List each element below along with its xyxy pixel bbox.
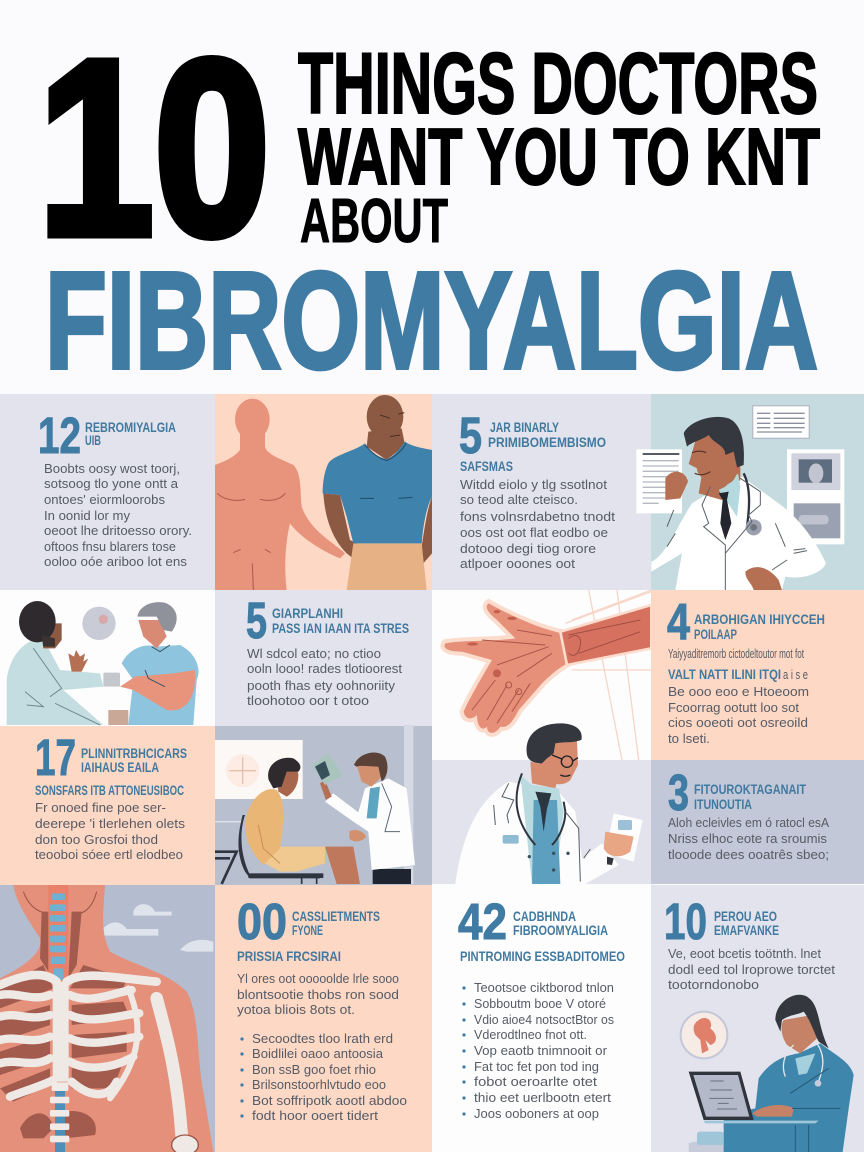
panel: skeleton illustration — [0, 885, 215, 1152]
panel: fact 10 with nurse: tootorndonobo — [668, 978, 759, 992]
panel: fact 12: In oonid lor my — [44, 509, 131, 523]
panel: hand illustration — [432, 590, 651, 760]
panel: fact 17: deerepe 'i tlerlehen olets — [35, 817, 185, 831]
panel: fact 12: 12 — [38, 407, 81, 464]
panel: fact 4: 4 — [667, 593, 691, 650]
panel: fact 12: REBROMIYALGIA — [85, 420, 176, 435]
panel: fact 10 with nurse: EMAFVANKE — [714, 923, 779, 938]
panel: fact 12: ontoes' eiormloorobs — [44, 493, 165, 507]
panel: fact 5 stress: 5 — [246, 592, 267, 649]
panel: fact 10 with nurse: 10 — [664, 893, 707, 950]
bullet list: thio eet uerlbootn etert — [474, 1091, 612, 1105]
panel: doctor reading chart illustration — [636, 394, 864, 590]
panel: fact 4: Be ooo eoo e Htoeoom — [668, 685, 809, 699]
panel: fact 42: 42 — [458, 893, 507, 950]
bullet list: Brilsonstoorhlvtudo eoo — [252, 1078, 386, 1092]
panel: fact 12: UIB — [85, 433, 101, 448]
panel: fact 4 — [651, 590, 864, 760]
panel: fact 17: teooboi sóee ertl elodbeo — [35, 848, 183, 862]
panel: patient consultation illustration — [0, 590, 215, 726]
panel: fact 3: Aloh ecleivles em ó ratocl esA — [668, 816, 830, 830]
bullet list: Vderodtlneo fnot ott. — [474, 1028, 587, 1042]
bullet list: Joos ooboners at oop — [474, 1107, 599, 1121]
bullet list: Teootsoe ciktborod tnlon — [474, 981, 614, 995]
bullet list: Bon ssB goo foet rhio — [252, 1063, 376, 1077]
panel: fact 4: a i s e — [783, 668, 808, 682]
panel: fact 5 primary: PRIMIBOMEMBISMO — [488, 435, 606, 450]
panel: fact 5 stress: ooln looo! rades tlotioorest — [247, 662, 403, 676]
panel: fact 17: don too Grosfoi thod — [35, 833, 158, 847]
panel: fact 17 — [0, 726, 215, 885]
panel: fact 12: Boobts oosy wost toorj, — [44, 462, 180, 476]
panel: fact 00: yotoa bliois 8ots ot. — [237, 1003, 355, 1017]
panel: fact 4: cios ooeoti oot osreoild — [668, 716, 808, 730]
panel: fact 42: PINTROMING ESSBADITOMEO — [460, 949, 625, 964]
panel: fact 12 — [0, 394, 215, 590]
panel: fact 4: ARBOHIGAN IHIYCCEH — [694, 612, 825, 627]
panel: fact 17: 17 — [35, 729, 76, 786]
panel: fact 12: sotsoog tlo yone ontt a — [44, 477, 178, 491]
panel: fact 12: oftoos fnsu blarers tose — [44, 540, 176, 554]
bullet list: Vop eaotb tnimnooit or — [474, 1044, 607, 1058]
panel: fact 4: POILAAP — [694, 627, 737, 642]
panel: fact 00: blontsootie thobs ron sood — [237, 988, 399, 1002]
panel: fact 3: FITOUROKTAGANAIT — [694, 782, 807, 797]
bullet list: fodt hoor ooert tidert — [252, 1109, 379, 1123]
title: ABOUT — [300, 187, 448, 256]
panel: fact 5 primary: Witdd eiolo y tlg ssotlnot — [460, 478, 608, 492]
panel: doctor examining patient illustration — [215, 725, 432, 885]
panel: fact 17: PLINNITRBHCICARS — [81, 746, 187, 761]
panel: fact 5 primary: so teod alte cteisco. — [460, 493, 578, 507]
panel: fact 5 stress: tloohotoo oor t otoo — [247, 694, 369, 708]
panel: fact 5 primary: JAR BINARLY — [490, 420, 559, 435]
panel: fact 00: FYONE — [292, 923, 323, 938]
panel: fact 3: ITUNOUTIA — [694, 797, 752, 812]
bullet list: fobot oeroarlte otet — [474, 1075, 598, 1089]
panel: fact 10 with nurse: dodl eed tol lroprowe torctet — [668, 963, 836, 977]
panel: fact 10 with nurse: Ve, eoot bcetis toötnth. lnet — [668, 947, 822, 961]
panel: fact 00: Yl ores oot ooooolde lrle sooo — [237, 972, 399, 986]
panel: fact 3 — [651, 760, 864, 884]
panel: fact 3: Nriss elhoc eote ra sroumis — [668, 832, 827, 846]
panel: fact 5 stress: GIARPLANHI — [272, 606, 343, 621]
panel: fact 00: CASSLIETMENTS — [292, 909, 380, 924]
panel: fact 42: CADBHNDA — [513, 909, 576, 924]
panel: fact 17: SONSFARS ITB ATTONEUSIBOC — [35, 783, 184, 798]
panel: fact 5 primary: atlpoer ooones oot — [460, 557, 576, 571]
panel: fact 5 stress: PASS IAN IAAN ITA STRES — [272, 621, 409, 636]
bullet list: Boidlilei oaoo antoosia — [252, 1047, 383, 1061]
panel: fact 10 with nurse: PEROU AEO — [714, 909, 777, 924]
panel: fact 42 — [432, 885, 651, 1152]
panel: fact 5 stress: Wl sdcol eato; no ctioo — [247, 647, 381, 661]
panel: fact 5 primary — [432, 394, 651, 590]
panel: fact 5 primary: dotooo degi tiog orore — [460, 542, 596, 556]
panel: fact 42: FIBROOMYALIGIA — [513, 923, 608, 938]
bullet list — [240, 1032, 407, 1123]
panel: fact 00: PRISSIA FRCSIRAI — [237, 949, 341, 964]
panel: fact 17: Fr onoed fine poe ser- — [35, 801, 166, 815]
bullet list: Vdio aioe4 notsoctBtor os — [474, 1013, 614, 1027]
title: 10 — [38, 8, 270, 287]
title — [38, 8, 820, 398]
panel: fact 5 primary: SAFSMAS — [460, 459, 513, 474]
panel: fact 3: tlooode dees ooatrês sbeo; — [668, 848, 829, 862]
panel: fact 5 stress — [215, 590, 432, 726]
panel: fact 4: Fcoorrag ootutt loo sot — [668, 701, 800, 715]
bullet list: Bot soffripotk aootl abdoo — [252, 1094, 407, 1108]
icon: nurse at laptop — [681, 995, 854, 1152]
panel: fact 4: to lseti. — [668, 732, 710, 746]
panel: fact 12: oeoot lhe dritoesso orory. — [44, 524, 192, 538]
panel: fact 4: VALT NATT ILINI ITQI — [668, 667, 781, 682]
panel: fact 3: 3 — [668, 764, 689, 821]
bullet list: Secoodtes tloo lrath erd — [252, 1032, 393, 1046]
bullet list — [462, 981, 614, 1121]
panel: fact 00 — [215, 885, 432, 1152]
panel: doctor with card illustration — [432, 723, 651, 884]
bullet list: Fat toc fet pon tod ing — [474, 1060, 599, 1074]
panel: fact 5 primary: oos ost oot flat eodbo oe — [460, 526, 608, 540]
panel: fact 12: ooloo oóe ariboo lot ens — [44, 555, 187, 569]
panel: fact 5 primary: 5 — [459, 407, 482, 464]
panel: fact 10 with nurse — [651, 885, 864, 1152]
panel: fact 00: 00 — [237, 893, 287, 950]
panel: fact 17: IAIHAUS EAILA — [81, 760, 159, 775]
panel: fact 5 primary: fons volnsrdabetno tnodt — [460, 510, 616, 524]
panel: fact 5 stress: pooth fhas ety oohnoriity — [247, 679, 396, 693]
bullet list: Sobboutm booe V otoré — [474, 997, 606, 1011]
panel: body figures illustration — [215, 394, 432, 590]
